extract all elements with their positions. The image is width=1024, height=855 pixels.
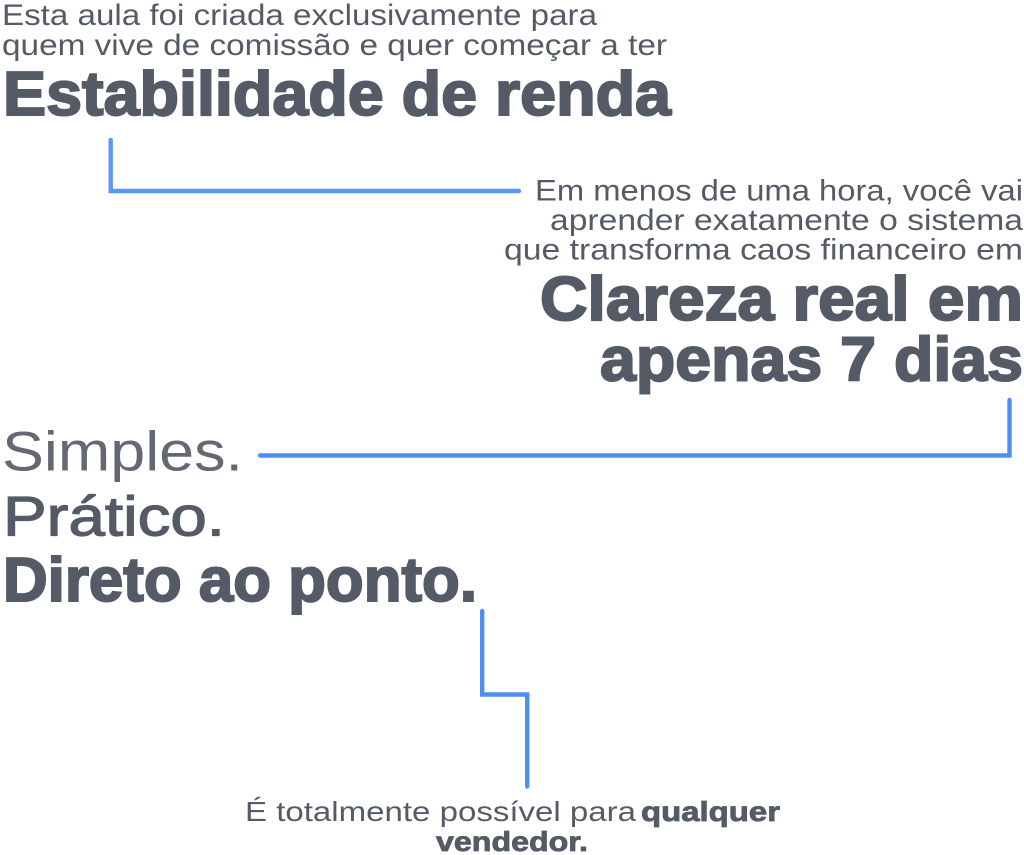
connector line 3 [482, 611, 527, 786]
text block: closing statement [245, 796, 780, 855]
text block: Simples: Simples. [2, 420, 243, 482]
text block: intro [2, 0, 667, 62]
text block: promise [504, 174, 1023, 266]
heading: Clareza real em apenas 7 dias: Clareza real em [540, 265, 1023, 334]
connector line 1 [111, 140, 519, 191]
text block: closing statement: qualquer [641, 796, 780, 827]
text block: promise: Em menos de uma hora, você vai [535, 174, 1023, 208]
heading: Clareza real em apenas 7 dias [540, 265, 1023, 394]
text block: promise: aprender exatamente o sistema [550, 204, 1023, 237]
heading: Direto ao ponto: Direto ao ponto. [3, 546, 477, 615]
text block: intro: quem vive de comissão e quer começar a ter [2, 29, 667, 62]
heading: Clareza real em apenas 7 dias: apenas 7 dias [600, 326, 1023, 394]
connector line 2 [260, 400, 1010, 456]
text block: Prático: Prático. [3, 484, 225, 548]
text block: closing statement: É totalmente possível para [245, 796, 637, 827]
text block: promise: que transforma caos financeiro em [504, 234, 1023, 266]
heading: Estabilidade de renda: Estabilidade de renda [3, 60, 672, 129]
